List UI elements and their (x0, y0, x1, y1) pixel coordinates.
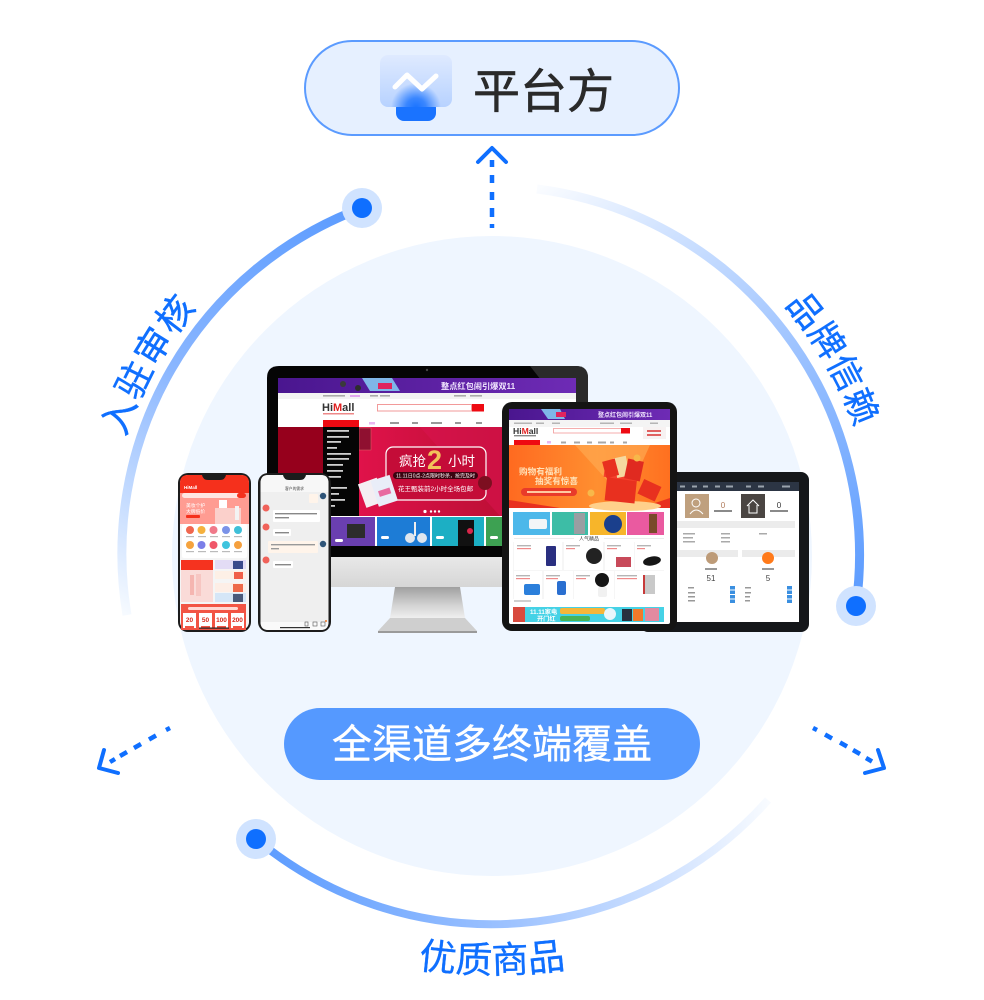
left message three (262, 556, 270, 564)
arc: entry review (122, 188, 382, 615)
arc: quality goods (236, 800, 768, 924)
right message one (309, 494, 318, 503)
store screen: 11.11家电 (530, 608, 558, 616)
monitor screen: 疯抢 (399, 453, 426, 469)
flash sale block (181, 560, 213, 571)
monitor screen: 11.11日0点-2点限时秒杀，抢完及时 (396, 472, 475, 480)
promo card (386, 447, 486, 500)
slide dots (423, 510, 440, 513)
appliance promo banner (513, 607, 664, 622)
popular heading: 人气精品 (579, 536, 599, 542)
shop screen: 20 (186, 617, 193, 624)
tablet logo: HiMall (513, 426, 538, 436)
category tiles (513, 512, 550, 535)
arc: brand trust (537, 189, 876, 626)
monitor screen: 花王甄装前2小时全场包邮 (398, 484, 474, 493)
left message one (262, 504, 270, 512)
stat card dark (741, 494, 765, 518)
chat screen (260, 475, 328, 630)
monitor screen: 小时 (448, 454, 475, 469)
shop screen: 200 (232, 617, 243, 624)
input bar (260, 622, 328, 630)
arrow: bottom left (99, 728, 170, 773)
front tablet (502, 402, 677, 631)
orange banner (509, 445, 670, 508)
background circle (172, 236, 812, 876)
right message two (268, 541, 318, 553)
dashboard screen (650, 482, 799, 622)
store screen (509, 409, 670, 624)
monitor (267, 366, 588, 633)
gift box (605, 473, 637, 503)
left message two (262, 524, 270, 530)
product grid (513, 542, 664, 599)
HiMall logo: HiMall (322, 402, 354, 414)
monitor screen: 整点红包闹引爆双11 (441, 381, 516, 391)
product tiles (330, 517, 375, 546)
coverage label: 全渠道多终端覆盖 (332, 723, 652, 767)
hero banner (278, 427, 360, 516)
coupons (181, 604, 246, 630)
label: quality goods: 优质商品 (421, 938, 564, 976)
platform label: 平台方 (473, 65, 614, 118)
section bars (677, 521, 795, 528)
arrow: bottom right (813, 728, 884, 773)
label: entry review: 入驻审核 (101, 293, 196, 436)
platform pill (305, 41, 679, 135)
monitor screen: 2 (427, 445, 442, 475)
right side tiles (215, 560, 246, 569)
monitor screen (278, 378, 576, 546)
stat card brown (685, 494, 709, 518)
coverage pill (284, 708, 700, 780)
monitor body (267, 366, 588, 557)
shop screen: 美妆个护 (186, 502, 205, 509)
chat screen: 客户的需求 (285, 486, 304, 491)
phone: chat app (258, 473, 331, 632)
store screen: 整点红包闹引爆双11 (598, 411, 653, 419)
diaper boxes (358, 478, 385, 508)
shop screen (180, 475, 249, 630)
store screen: 抽奖有惊喜 (535, 475, 578, 486)
search box (378, 404, 472, 411)
category menu (323, 420, 359, 427)
dashboard screen: 51 (707, 574, 716, 583)
shop screen: HiMall (184, 485, 197, 490)
shop screen: 100 (216, 617, 227, 624)
dashboard screen: 0 (721, 501, 726, 510)
shop screen: 大牌低价 (186, 508, 205, 515)
phone: shop app (178, 473, 251, 632)
icon: monitor with trend line (380, 55, 452, 121)
arrow: up to platform (478, 148, 506, 228)
back tablet (640, 472, 809, 632)
icon grid (182, 524, 247, 558)
store screen: 购物有福利 (519, 466, 562, 476)
monitor stand (378, 587, 477, 633)
shop screen: 50 (202, 617, 209, 624)
store screen: 开门红 (537, 615, 556, 623)
label: brand trust: 品牌信赖 (784, 293, 880, 427)
dashboard screen: 0 (777, 501, 782, 510)
dashboard screen: 5 (766, 574, 771, 583)
